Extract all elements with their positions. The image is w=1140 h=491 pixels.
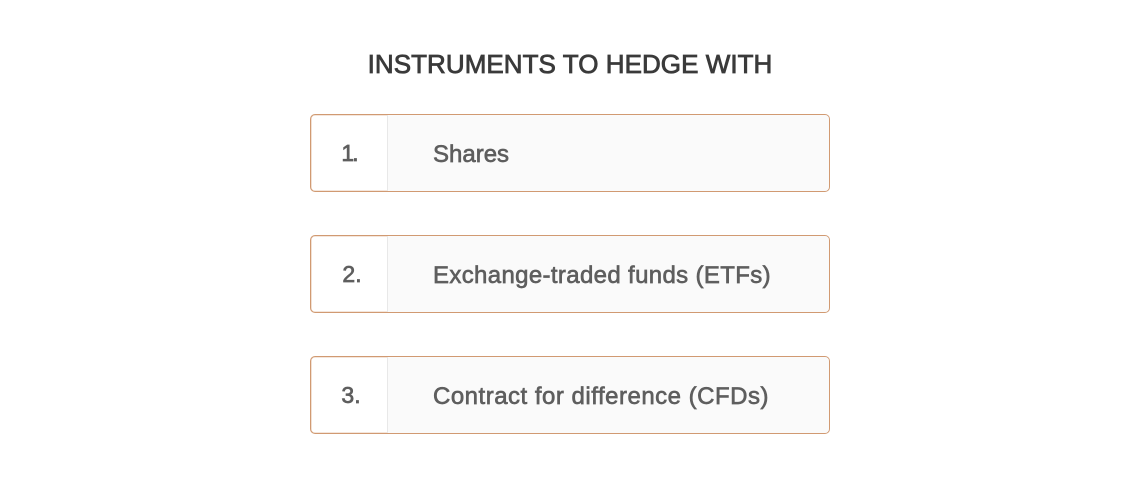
- row 1: Shares: [310, 114, 830, 192]
- label cell: Shares: [387, 115, 829, 191]
- number 2: 2.: [342, 261, 362, 287]
- label cell: CFDs: [387, 357, 829, 433]
- label cell: ETFs: Exchange-traded funds (ETFs): [433, 262, 771, 289]
- title: INSTRUMENTS TO HEDGE WITH: [368, 49, 772, 79]
- label cell: Shares: Shares: [433, 141, 509, 168]
- number 1: 1.: [341, 140, 357, 166]
- row 2: ETFs: [310, 235, 830, 313]
- number 3: 3.: [341, 382, 361, 408]
- label cell: CFDs: Contract for difference (CFDs): [433, 383, 769, 410]
- row 3: CFDs: [310, 356, 830, 434]
- label cell: ETFs: [387, 236, 829, 312]
